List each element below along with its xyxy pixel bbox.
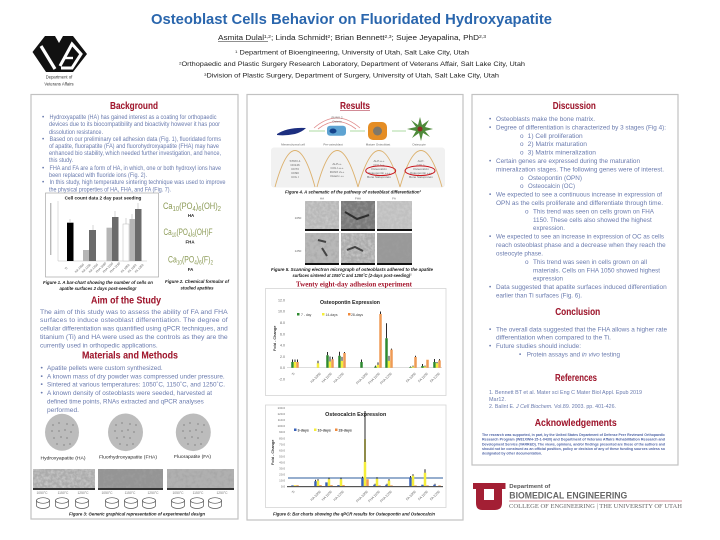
- chemical formulas: ): [196, 201, 198, 211]
- text: references list: Mar12.: [489, 397, 506, 403]
- figure 4: osteoblast differentiation schematic: [271, 116, 445, 194]
- bar chart: cell count: HA 1150: [81, 263, 92, 274]
- chart: osteopontin expression: -2.0: [279, 378, 285, 382]
- text: background bullets: [42, 114, 226, 193]
- chart: osteopontin expression: 8.0: [280, 321, 285, 325]
- chart: osteocalcin expression: 50.0: [279, 454, 285, 458]
- figure 3: pellet discs: Hydroxyapatite (HA): [40, 456, 86, 462]
- chart: osteocalcin expression: 80.0: [279, 436, 285, 440]
- text: aim: [40, 309, 228, 350]
- chart: osteocalcin expression: 20.0: [279, 473, 285, 477]
- x labels: FA 1150: [417, 372, 429, 383]
- text: discussion bullets: We expected to see a continuous increase in expression of: [496, 192, 662, 199]
- text: conclusion bullets: The overall data suggested that the FHA allows a higher rate: [496, 327, 667, 334]
- affiliations: Orthopaedic and Plastic Surgery Research Laboratory, Department of Veterans Affair, Salt Lake City, Utah: [181, 61, 525, 68]
- gene expression arches: RUNX 2++: [330, 170, 344, 174]
- text: discussion bullets: •: [489, 116, 491, 123]
- gene expression arches: COL I+++: [331, 166, 344, 170]
- text: discussion bullets: o: [520, 133, 524, 140]
- text: acknowledgements: [482, 433, 666, 456]
- differentiation cells row: Osteocyte: [412, 142, 426, 146]
- logo: University of Utah biomedical engineering: COLLEGE OF ENGINEERING | THE UNIVERSITY OF UTAH: [509, 503, 682, 510]
- figure 5 caption: [271, 267, 433, 278]
- chemical formulas: 6: [199, 260, 202, 266]
- gene expression arches: Osteocalcin: [413, 167, 429, 171]
- x labels: HA 1150: [321, 372, 333, 384]
- x labels: FHA 1250: [379, 372, 393, 385]
- legend: 7 - day: [301, 313, 312, 317]
- figure 5: electron micrographs: [295, 196, 412, 265]
- affiliations: 2: [179, 60, 182, 65]
- chemical formulas: (F): [202, 254, 210, 264]
- text: background bullets: •: [42, 136, 44, 143]
- icon: Veterans Affairs logo: Veterans Affairs: [44, 82, 74, 86]
- gene expression arches: ALP++: [332, 162, 342, 166]
- figure 5: electron micrographs: 1250: [295, 249, 302, 253]
- text: aim: surfaces to induce osteoblast differentiation. The degree of: [40, 317, 228, 324]
- figure 5 caption: Figure 5. Scanning electron micrograph of osteoblasts adhered to the apatite: [271, 267, 433, 272]
- chart: osteocalcin expression: 130.0: [277, 406, 285, 410]
- text: discussion bullets: 1) Cell proliferation: [528, 133, 583, 140]
- icon: Veterans Affairs logo: [32, 36, 87, 86]
- text: conclusion bullets: •: [489, 327, 491, 334]
- text: discussion bullets: o: [525, 259, 529, 266]
- figure 3 caption: Figure 3: Generic graphical representation of experimental design: [69, 512, 205, 517]
- heading: references: References: [555, 373, 597, 384]
- text: background bullets: •: [42, 165, 44, 172]
- text: background bullets: this study.: [49, 157, 73, 164]
- heading: background: Background: [110, 101, 158, 112]
- bar chart: cell count: FHA 1050: [95, 261, 107, 274]
- x labels: FHA 1050: [355, 372, 369, 385]
- chart: osteocalcin expression: [266, 405, 446, 508]
- authors: Asmita Dulal: [218, 33, 259, 42]
- chart: osteopontin expression: 4.0: [280, 344, 285, 348]
- gene expression arches: COL I-: [417, 163, 425, 167]
- text: aim: currently used in orthopedic applications.: [40, 343, 158, 350]
- chemical formulas: HA: [188, 213, 195, 218]
- text: discussion bullets: materials. Cells on FHA 1050 showed highest: [533, 267, 660, 274]
- chemical formulas: FHA: [185, 240, 195, 244]
- x labels: FHA 1150: [367, 490, 381, 503]
- bar chart: cell count: FA 1150: [127, 263, 138, 274]
- affiliations: 3: [204, 72, 207, 77]
- chemical formulas: 6: [198, 206, 202, 213]
- text: methods bullets: •: [40, 390, 44, 397]
- text: discussion bullets: Certain genes are expressed during the maturation: [496, 158, 640, 165]
- x labels: [291, 372, 441, 385]
- gene expression arches: Bone Sialoprotein: [367, 175, 391, 179]
- panel: right column: [472, 94, 678, 465]
- figure 5: electron micrographs: FHA: [355, 196, 361, 200]
- x labels: HA 1250: [333, 372, 345, 384]
- text: references list: [489, 390, 642, 410]
- text: methods bullets: A known mass of dry powder was compressed under pressure.: [47, 373, 225, 380]
- differentiation cells row: Pre-osteoblast: [323, 142, 343, 146]
- x labels: FHA 1150: [367, 372, 381, 385]
- gene expression arches: COL I: [291, 175, 299, 179]
- bar chart: cell count: Cell count data 2 day past seeding: [65, 196, 142, 200]
- x labels: FA 1050: [405, 372, 417, 384]
- figure 1 caption: [43, 280, 153, 291]
- bars: [291, 338, 436, 368]
- x labels: HA 1050: [310, 372, 322, 384]
- text: discussion bullets: osteocyte phase.: [496, 251, 543, 258]
- text: discussion bullets: Osteopontin (OPN): [528, 175, 582, 182]
- text: conclusion bullets: Future studies should include:: [496, 343, 581, 350]
- text: discussion bullets: expression: [533, 276, 563, 283]
- chart: osteopontin expression: 0.0: [280, 366, 285, 370]
- chemical formulas: ): [197, 254, 199, 264]
- legend: [294, 428, 352, 432]
- figure 3: pellet discs: Fluorapatite (FA): [174, 454, 211, 460]
- icon: Veterans Affairs logo: Department of: [46, 74, 73, 80]
- legend: 14-days: [326, 313, 338, 317]
- chemical formulas: 10: [172, 233, 177, 239]
- chemical formulas: 4: [192, 206, 196, 213]
- figure 1 caption: apatite surfaces 2 days post-seeding!: [60, 286, 137, 291]
- figure 3: micrograph strips: [33, 469, 234, 495]
- chart: osteocalcin expression: 110.0: [278, 418, 285, 422]
- gene expression arches: Osteopontin +++: [410, 171, 432, 175]
- text: conclusion bullets: Protein assays and in vivo testing: [527, 352, 620, 359]
- text: aim: titanium (Ti) and HA were used as the controls as they are the: [40, 334, 228, 341]
- chart: osteocalcin expression: 90.0: [279, 430, 285, 434]
- heading: discussion: Discussion: [553, 101, 596, 112]
- text: methods bullets: •: [40, 382, 44, 389]
- bar chart: cell count: Ti: [64, 266, 69, 271]
- text: discussion bullets: 3) Matrix mineralization: [528, 149, 596, 156]
- x labels: FA 1150: [417, 490, 429, 501]
- figure 5: electron micrographs: 1050: [295, 216, 302, 220]
- text: references list: 2. Balint E. J Cell Biochem. Vol.89. 2003. pp. 401-426.: [489, 404, 616, 410]
- text: discussion bullets: o: [520, 183, 524, 190]
- figure 4 caption: Figure 4. A schematic of the pathway of osteoblast differentiation¹: [285, 190, 421, 194]
- gene expression arches: Osterix ++: [330, 174, 344, 178]
- figure 3: pellet discs: [40, 414, 211, 462]
- chemical formulas: (PO: [176, 227, 188, 237]
- text: background bullets: enhanced bio stability, which needed further investigation, and hence,: [49, 150, 221, 157]
- chemical formulas: 2: [218, 206, 221, 213]
- heading: twenty eight-day experiment: Twenty eight-day adhesion experiment: [296, 280, 413, 288]
- legend: 28-days: [351, 313, 363, 317]
- x labels: Ti: [291, 490, 296, 495]
- differentiation cells row: Mature Osteoblast: [366, 142, 390, 146]
- differentiation cells row: Mesenchymal cell: [281, 142, 305, 146]
- chart: osteocalcin expression: 30.0: [279, 466, 285, 470]
- chart: osteopontin expression: 10.0: [278, 310, 285, 314]
- chemical formulas: 2: [210, 260, 214, 266]
- figure 3: micrograph strips: 1150°C: [58, 491, 69, 495]
- text: methods bullets: Sintered at various temperatures: 1050˚C, 1150˚C, and 1250˚C.: [47, 381, 225, 389]
- text: background bullets: •: [42, 114, 44, 121]
- differentiation cells row: Osterix: [332, 120, 342, 124]
- text: discussion bullets: We expected to see an increase in expression of OC as cells: [496, 234, 664, 241]
- chart: osteopontin expression: 12.0: [278, 298, 285, 302]
- text: methods bullets: defined time points, RNAs extracted and qPCR analyses: [47, 399, 204, 406]
- text: conclusion bullets: •: [489, 343, 491, 350]
- gene expression arches: ALP+++: [374, 159, 385, 163]
- legend: 3-days: [298, 428, 309, 432]
- text: background bullets: of apatite, fluorapatite (FA) and fluorohydroxyapatite (FHA) may have: [49, 143, 219, 150]
- gene expression arches: Bone Sialoprotein: [409, 175, 433, 179]
- x labels: Ti: [291, 372, 296, 377]
- x labels: FA 1250: [429, 490, 441, 502]
- text: methods bullets: [40, 365, 225, 414]
- panel: middle column: [247, 94, 463, 520]
- text: methods bullets: A known density of osteoblasts were seeded, harvested at: [47, 390, 212, 397]
- figure 5: electron micrographs: HA: [320, 196, 324, 200]
- chemical formulas: 10: [173, 206, 179, 213]
- text: discussion bullets: This trend was seen on cells grown on FHA: [533, 209, 655, 216]
- x labels: FA 1250: [429, 372, 441, 384]
- gene expression arches: CD73: [291, 167, 299, 171]
- text: conclusion bullets: differentiation when compared to the Ti.: [496, 335, 611, 342]
- text: background bullets: •: [42, 179, 44, 186]
- chart: osteocalcin expression: 0.0: [281, 485, 285, 489]
- text: discussion bullets: 1150. These cells also showed the highest: [533, 217, 652, 224]
- figure 3: micrograph strips: 1250°C: [216, 491, 228, 495]
- chemical formulas: 6: [192, 233, 195, 239]
- chemical formulas: (PO: [182, 254, 194, 264]
- title: Osteoblast Cells Behavior on Fluoridated Hydroxyapatite: [151, 11, 552, 28]
- text: discussion bullets: •: [489, 192, 491, 199]
- text: discussion bullets: •: [489, 125, 491, 132]
- gene expression arches: CD146: [290, 163, 300, 167]
- figure 3: micrograph strips: 1250°C: [77, 491, 89, 495]
- affiliations: 1: [235, 49, 238, 54]
- affiliations: [179, 49, 525, 80]
- figure 5 caption: surfaces sintered at 1050˚C and 1250˚C (2-days post-seeding)¹: [292, 272, 412, 278]
- logo: University of Utah biomedical engineering: Department of: [509, 484, 551, 490]
- figure 3: micrograph strips: 1150°C: [125, 491, 136, 495]
- affiliations: Division of Plastic Surgery, Department of Surgery, University of Utah, Salt Lake City, Utah: [206, 73, 499, 80]
- text: acknowledgements: should not be construed as an official position, policy or decision of any of these funding sources unless so: [482, 447, 666, 451]
- text: discussion bullets: [489, 116, 667, 300]
- figure 3: micrograph strips: 1050°C: [36, 491, 48, 495]
- gene expression arches: Osteopontin +++: [368, 171, 390, 175]
- text: discussion bullets: This trend was seen in cells grown on all: [533, 259, 647, 266]
- affiliations: Department of Bioengineering, University of Utah, Salt Lake City, Utah: [238, 49, 469, 56]
- chart: osteopontin expression: 6.0: [280, 332, 285, 336]
- text: discussion bullets: •: [489, 284, 491, 291]
- text: methods bullets: Apatite pellets were custom synthesized.: [47, 365, 163, 372]
- chemical formulas: 10: [177, 260, 182, 266]
- text: background bullets: the physical properties of HA, FHA, and FA (Fig. 7).: [49, 186, 171, 193]
- figure 2 caption: [165, 279, 229, 291]
- text: discussion bullets: 2) Matrix maturation: [528, 141, 587, 148]
- bar chart: cell count: FHA 1150: [102, 261, 114, 274]
- figure 3: micrograph strips: 1050°C: [172, 491, 184, 495]
- chemical formulas: ): [190, 227, 192, 237]
- text: discussion bullets: o: [520, 149, 524, 156]
- text: acknowledgements: Development Service (VARR&D). The views, opinions, and/or findings presented are those of the authors and: [482, 442, 665, 446]
- x labels: FHA 1050: [355, 490, 369, 503]
- text: discussion bullets: o: [525, 209, 529, 216]
- chemical formulas: (OH): [201, 201, 218, 211]
- icon: block U: [473, 483, 506, 510]
- text: references list: 1. Bennett BT et al. Mater sci Eng C Mater Biol Appl. Epub 2019: [489, 390, 642, 396]
- text: discussion bullets: expression.: [533, 225, 565, 232]
- figure 3: micrograph strips: 1250°C: [147, 491, 159, 495]
- figure 2 caption: studied apatites: [180, 286, 214, 291]
- text: background bullets: dissolution resistance.: [49, 129, 103, 136]
- heading: materials and methods: Materials and Methods: [82, 350, 178, 361]
- legend: [297, 313, 363, 317]
- figure 3: pellet discs: Fluorhydroxyapatite (FHA): [99, 454, 157, 460]
- chart: osteopontin expression: Osteopontin Expression: [320, 300, 380, 306]
- figure 2 caption: Figure 2. Chemical formular of: [165, 279, 229, 284]
- panel: left column: [31, 94, 238, 519]
- text: discussion bullets: Osteoblasts make the bone matrix.: [496, 116, 595, 123]
- legend: 28-days: [338, 428, 352, 432]
- text: methods bullets: •: [40, 365, 44, 372]
- authors: 2,3: [479, 34, 487, 39]
- text: acknowledgements: designated by other documentation.: [482, 452, 542, 456]
- text: background bullets: been replaced with fluoride ions (Fig. 2).: [49, 172, 147, 179]
- chemical formulas: FA: [188, 267, 194, 272]
- text: methods bullets: •: [40, 373, 44, 380]
- text: background bullets: FHA and FA are a form of HA, in which, one or both hydroxyl ions have: [50, 165, 221, 172]
- chart: osteocalcin expression: Osteocalcin Expression: [325, 412, 386, 418]
- text: discussion bullets: OPN as the cells proliferate and differentiate through time.: [496, 200, 663, 207]
- chart: osteocalcin expression: 100.0: [277, 424, 285, 428]
- text: aim: The aim of this study was to assess the ability of FA and FHA: [40, 309, 228, 316]
- chart: osteocalcin expression: 40.0: [279, 460, 285, 464]
- text: discussion bullets: reach osteoblast phase and a decrease when they reach the: [496, 242, 666, 249]
- figure 6 caption: Figure 6: Bar charts showing the qPCR results for Osteopontin and Osteocalcin: [273, 511, 435, 516]
- text: discussion bullets: Data suggested that apatite surfaces induced differentiation: [496, 284, 667, 291]
- chart: osteocalcin expression: 120.0: [277, 412, 285, 416]
- text: discussion bullets: mineralization stages. The following genes were of interest.: [496, 167, 664, 174]
- chart: osteocalcin expression: 60.0: [279, 448, 285, 452]
- figure 5: electron micrographs: FA: [392, 196, 396, 200]
- text: methods bullets: performed.: [47, 407, 79, 414]
- text: aim: cellular differentiation was quantified using qPCR techniques, and: [40, 326, 228, 333]
- text: discussion bullets: o: [520, 175, 524, 182]
- gene expression arches: CD90: [291, 171, 299, 175]
- chart: osteopontin expression: Fold - Change: [273, 326, 277, 351]
- heading: aim of the study: Aim of the Study: [91, 295, 161, 306]
- authors: 2: [328, 34, 331, 39]
- heading: acknowledgements: Acknowledgements: [535, 418, 617, 429]
- text: background bullets: Hydroxyapatite (HA) has gained interest as a coating for orthopaedic: [50, 114, 217, 121]
- authors: 2,3: [385, 34, 392, 39]
- chemical formulas: Ca: [163, 201, 175, 211]
- chemical formulas: 4: [188, 233, 191, 239]
- text: discussion bullets: •: [489, 234, 491, 241]
- authors: [218, 33, 487, 42]
- text: discussion bullets: •: [489, 158, 491, 165]
- differentiation cells row: RUNX 2: [331, 116, 343, 120]
- chemical formulas: (OH)F: [195, 227, 213, 237]
- logo: University of Utah biomedical engineering: BIOMEDICAL ENGINEERING: [509, 490, 627, 500]
- text: background bullets: In this study, high temperature sintering technique was used to improve: [50, 179, 226, 186]
- heading: conclusion: Conclusion: [555, 307, 600, 318]
- authors: ; Brian Bennett: [330, 33, 385, 42]
- chart: osteocalcin expression: 10.0: [279, 479, 285, 483]
- logo: University of Utah biomedical engineering: [473, 483, 682, 510]
- text: discussion bullets: Degree of differentiation is characterized by 3 stages (Fig 4):: [496, 125, 666, 132]
- bar chart: cell count: [46, 193, 158, 277]
- x labels: HA 1250: [333, 490, 345, 502]
- figure 3: sample dishes: [36, 498, 222, 508]
- chemical formulas: 4: [194, 260, 197, 266]
- bar chart: cell count: HA 1250: [88, 263, 99, 274]
- authors: ; Linda Schmidt: [271, 33, 328, 42]
- chemical formulas: (PO: [179, 201, 192, 211]
- bar chart: cell count: FA 1250: [134, 263, 145, 274]
- x labels: [291, 490, 441, 503]
- heading: results: Results: [340, 101, 370, 112]
- authors: ; Sujee Jeyapalina, PhD: [392, 33, 479, 42]
- figure 3: micrograph strips: 1050°C: [101, 491, 113, 495]
- x labels: HA 1150: [321, 490, 333, 502]
- text: discussion bullets: earlier than Ti surfaces (Fig. 6).: [496, 293, 582, 300]
- x labels: FHA 1250: [379, 490, 393, 503]
- chemical formulas: Ca: [168, 254, 180, 264]
- authors: 1,2: [264, 34, 272, 39]
- chemical formulas: [163, 201, 221, 272]
- x labels: HA 1050: [310, 490, 322, 502]
- differentiation cells row: [277, 116, 433, 146]
- gene expression arches: ALP-: [418, 159, 424, 163]
- bar chart: cell count: FHA 1250: [109, 261, 121, 274]
- text: background bullets: Based on our preliminary cell adhesion data (Fig. 1), fluoridated forms: [50, 136, 221, 143]
- chart: osteopontin expression: [266, 288, 446, 396]
- text: acknowledgements: Research Program (W81XWH-15-1-0430) and Department of Veterans Affairs Rehabilitation Research and: [482, 438, 665, 442]
- chemical formulas: Ca: [164, 227, 175, 237]
- text: acknowledgements: The research was supported, in part, by the United States Department of Defense Peer Reviewed Orthopaedic: [482, 433, 665, 437]
- text: discussion bullets: Osteocalcin (OC): [528, 183, 575, 190]
- text: conclusion bullets: •: [519, 352, 521, 359]
- bar chart: cell count: HA 1050: [74, 263, 85, 274]
- x labels: FA 1050: [405, 490, 417, 502]
- chart: osteopontin expression: 2.0: [280, 355, 285, 359]
- chart: osteocalcin expression: Fold - Change: [271, 440, 275, 465]
- gene expression arches: [271, 148, 445, 188]
- text: conclusion bullets: [489, 327, 667, 359]
- bars: [291, 478, 436, 486]
- text: discussion bullets: o: [520, 141, 524, 148]
- header: [32, 11, 552, 86]
- text: background bullets: devices due to its biocompatibility and bioactivity however it has poor: [49, 121, 221, 128]
- figure 1 caption: Figure 1. A bar-chart showing the number of cells on: [43, 280, 153, 285]
- gene expression arches: STRO-1: [289, 159, 301, 163]
- figure 3: micrograph strips: 1150°C: [193, 491, 204, 495]
- gene expression arches: Osteocalcin: [371, 167, 387, 171]
- gene expression arches: COL I++: [373, 163, 385, 167]
- bar chart: cell count: FA 1050: [120, 263, 131, 274]
- chart: osteocalcin expression: 70.0: [279, 442, 285, 446]
- legend: 10-days: [318, 428, 331, 432]
